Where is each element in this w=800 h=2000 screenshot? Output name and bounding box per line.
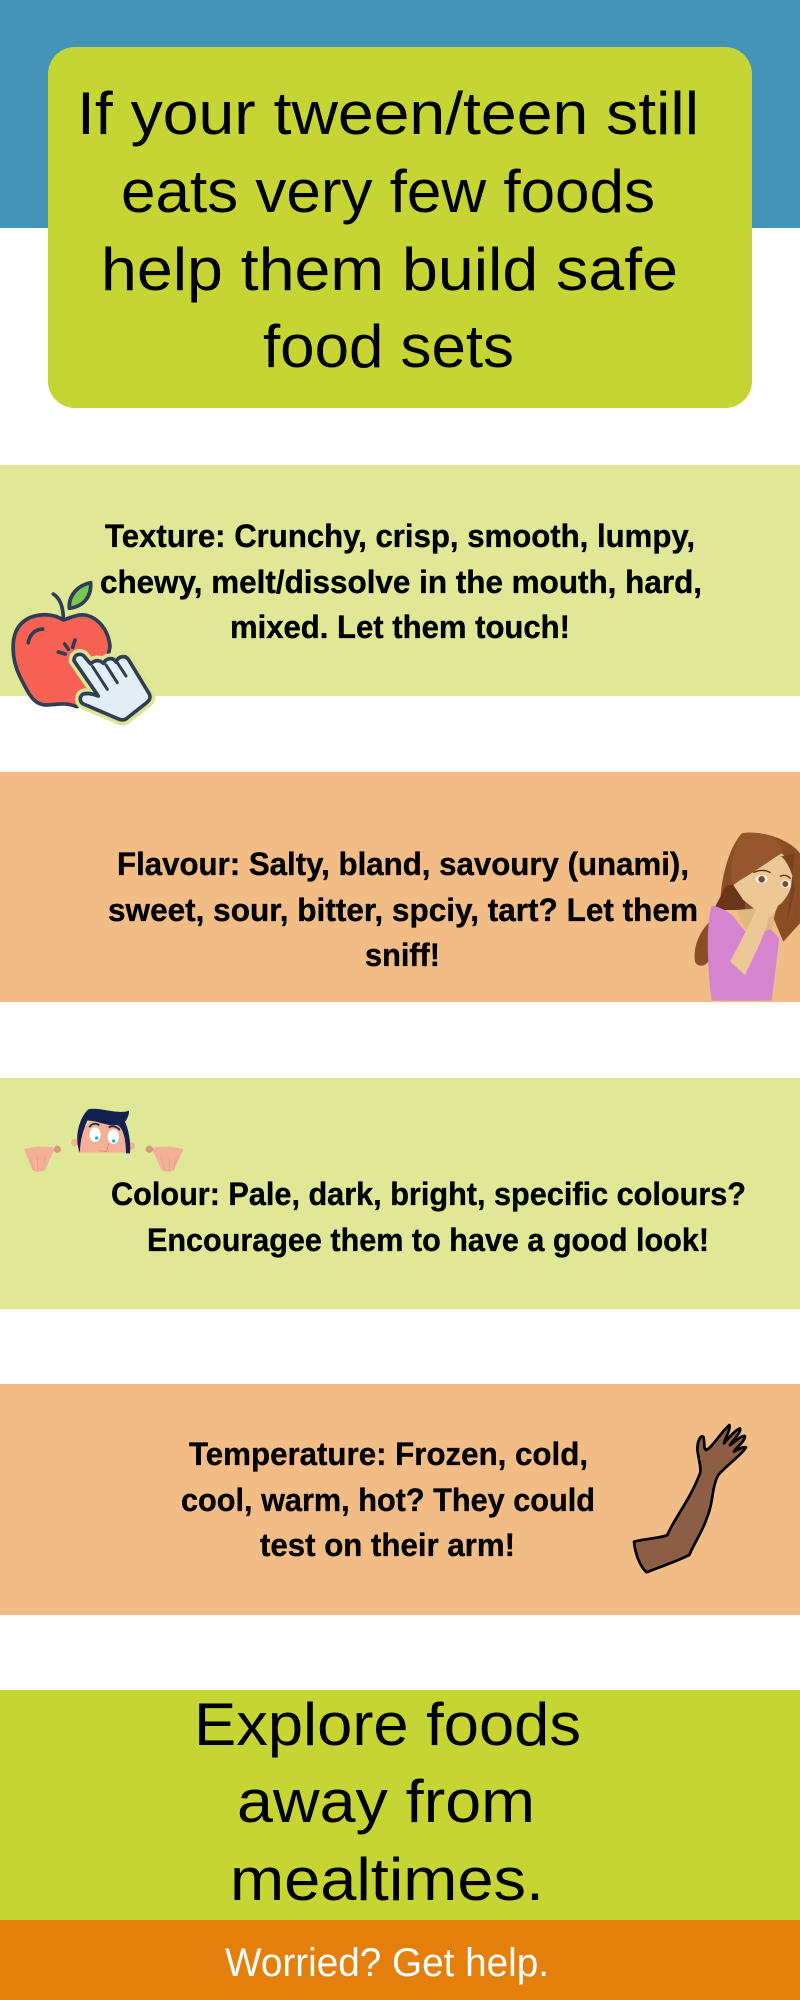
panel: flavour [0,772,800,1002]
explore foods text: Explore foods [194,1691,581,1758]
texture text: mixed. Let them touch! [230,609,570,645]
colour text: Encouragee them to have a good look! [147,1222,709,1258]
icon: apple with pointing hand [13,583,150,720]
footer text: Worried? Get help. [225,1941,549,1985]
flavour text: sweet, sour, bitter, spciy, tart? Let them [108,892,698,928]
explore foods text: away from [237,1768,535,1835]
title heading: eats very few foods [121,158,655,225]
panel: explore foods message [0,1690,800,1920]
flavour text: Flavour: Salty, bland, savoury (unami), [117,846,689,882]
colour text: Colour: Pale, dark, bright, specific colours? [111,1176,746,1212]
temperature text: test on their arm! [260,1527,515,1563]
title heading: food sets [263,313,514,380]
panel: title [48,47,752,408]
icon: raised forearm [634,1425,746,1572]
panel: texture [0,465,800,696]
flavour text: sniff! [365,937,440,973]
title heading: If your tween/teen still [77,80,699,147]
panel: colour [0,1078,800,1309]
icon: girl covering her nose [695,833,800,1001]
texture text: chewy, melt/dissolve in the mouth, hard, [100,564,702,600]
temperature text: cool, warm, hot? They could [181,1482,595,1518]
title heading: help them build safe [101,236,678,303]
texture text: Texture: Crunchy, crisp, smooth, lumpy, [105,518,695,554]
footer banner [0,1920,800,2000]
icon: peeking person [24,1109,183,1172]
explore foods text: mealtimes. [230,1846,544,1913]
panel: temperature [0,1384,800,1615]
temperature text: Temperature: Frozen, cold, [189,1436,588,1472]
blue header band [0,0,800,228]
